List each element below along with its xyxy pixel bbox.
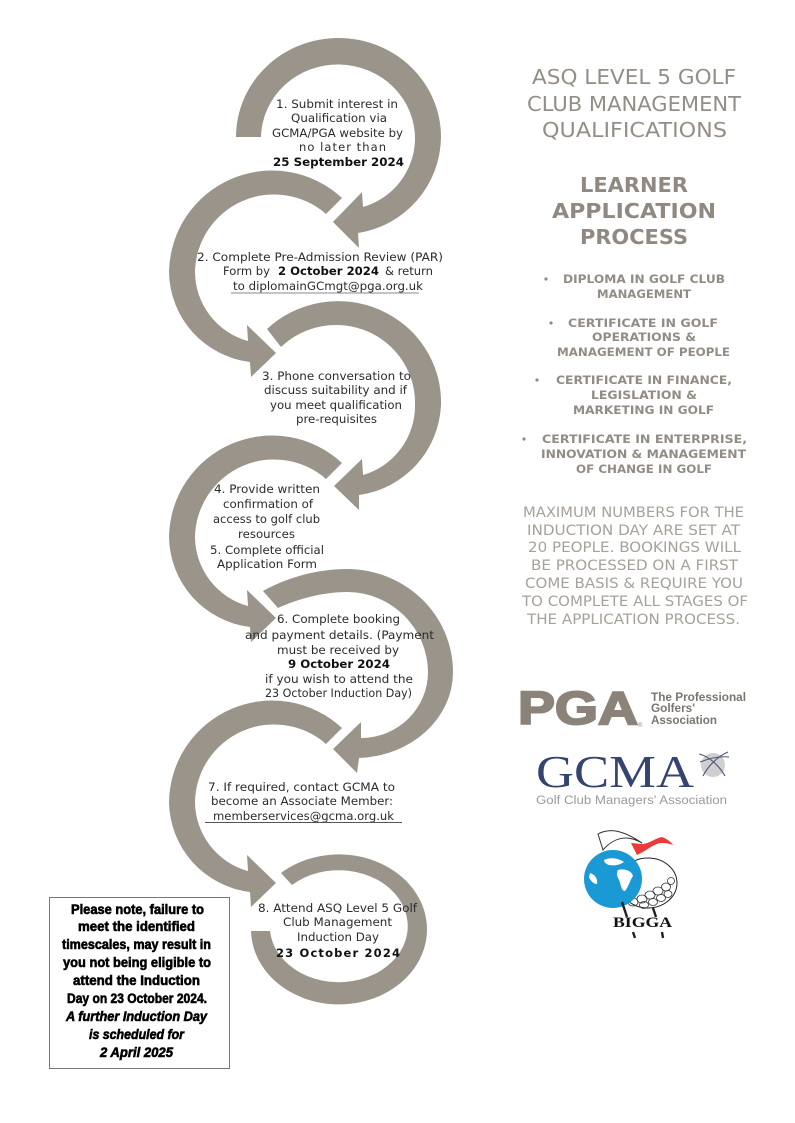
step 7 text: 7. If required, contact GCMA to (208, 780, 395, 794)
step 5 text (210, 543, 324, 571)
step 2 text: 2. Complete Pre-Admission Review (PAR) (197, 250, 443, 264)
step 1 text: GCMA/PGA website by (272, 126, 403, 140)
text block: induction day numbers: THE APPLICATION PROCESS. (526, 612, 740, 628)
title (527, 65, 741, 142)
step 4 text (213, 482, 320, 541)
step 6 text: if you wish to attend the (265, 672, 413, 686)
step 5 text: Application Form (217, 557, 317, 571)
callout: induction day note: 2 April 2025 (99, 1045, 173, 1060)
step 3 text: 3. Phone conversation to (262, 369, 411, 383)
callout: induction day note: A further Induction Day (65, 1009, 208, 1024)
step 8 text: Club Management (283, 915, 392, 929)
heading: learner application process: LEARNER (580, 173, 688, 197)
step 2 text: Form by (223, 264, 270, 278)
list: qualifications: MARKETING IN GOLF (573, 403, 714, 417)
step 8 text: 8. Attend ASQ Level 5 Golf (258, 901, 418, 915)
list: qualifications: INNOVATION & MANAGEMENT (541, 447, 746, 461)
step 7 text: memberservices@gcma.org.uk (213, 809, 394, 823)
logo: PGA: Association (651, 713, 717, 727)
step 2 text (197, 250, 443, 294)
logo: GCMA (536, 746, 729, 807)
text block: induction day numbers: MAXIMUM NUMBERS FOR THE (523, 505, 744, 521)
arrow: step 2 (169, 171, 342, 377)
step 3 text (262, 369, 411, 426)
step 1 text: no later than (299, 140, 386, 154)
step 5 text: 5. Complete official (210, 543, 324, 557)
step 4 text: confirmation of (223, 497, 314, 511)
heading: learner application process: APPLICATION (552, 199, 716, 223)
step 8 text: 23 October 2024 (276, 946, 400, 960)
arrow: step 6 (263, 569, 453, 773)
text block: induction day numbers: TO COMPLETE ALL STAGES OF (521, 594, 748, 610)
step 1 text: 25 September 2024 (273, 155, 404, 169)
logo: PGA: Golfers' (651, 701, 695, 715)
list: qualifications (522, 272, 747, 476)
step 2 text: & return (385, 264, 433, 278)
step 6 text: 23 October Induction Day) (265, 686, 412, 700)
callout: induction day note: timescales, may result in (62, 937, 211, 952)
callout: induction day note (50, 898, 230, 1068)
step 3 text: discuss suitability and if (264, 383, 408, 397)
logo: GCMA: Golf Club Managers' Association (536, 795, 727, 807)
arrow: steps 4 and 5 (169, 436, 342, 642)
logo: PGA (518, 682, 746, 734)
list: qualifications: MANAGEMENT OF PEOPLE (557, 345, 730, 359)
step 8 text (258, 901, 418, 960)
step 1 text: 1. Submit interest in (276, 97, 398, 111)
logo: PGA: ® (638, 722, 643, 729)
title: CLUB MANAGEMENT (527, 92, 741, 116)
callout: induction day note: Please note, failure to (71, 902, 204, 917)
step 2 text: 2 October 2024 (278, 264, 379, 278)
step 2 text: to diplomainGCmgt@pga.org.uk (233, 279, 423, 293)
step 6 text: 6. Complete booking (277, 612, 400, 626)
step 7 text (205, 780, 402, 823)
list: qualifications: CERTIFICATE IN GOLF (568, 316, 718, 330)
step 4 text: 4. Provide written (214, 482, 320, 496)
arrow: step 7 (169, 701, 342, 907)
list: qualifications: CERTIFICATE IN FINANCE, (556, 373, 732, 387)
arrow: step 3 (267, 301, 441, 510)
callout: induction day note: you not being eligible to (63, 955, 211, 970)
list: qualifications: LEGISLATION & (591, 388, 697, 402)
step 3 text: pre-requisites (296, 412, 377, 426)
step 3 text: you meet qualification (270, 398, 402, 412)
step 8 text: Induction Day (297, 930, 379, 944)
step 1 text (272, 97, 404, 169)
step 4 text: resources (238, 527, 295, 541)
text block: induction day numbers: COME BASIS & REQUIRE YOU (525, 576, 743, 592)
logo: GCMA: GCMA (536, 746, 694, 797)
logo: PGA: The Professional (651, 690, 746, 704)
step 4 text: access to golf club (213, 512, 320, 526)
text block: induction day numbers: BE PROCESSED ON A FIRST (531, 558, 738, 574)
logo: BIGGA: BIGGA (613, 915, 672, 931)
list: qualifications: MANAGEMENT (597, 287, 691, 301)
list: qualifications: DIPLOMA IN GOLF CLUB (563, 272, 725, 286)
heading: learner application process: PROCESS (580, 225, 688, 249)
heading: learner application process (552, 173, 716, 249)
arrow: step 8 ring (251, 854, 427, 1004)
text block: induction day numbers (521, 505, 748, 628)
step 6 text (245, 612, 435, 700)
arrow: step 1 (236, 38, 441, 248)
step 6 text: 9 October 2024 (288, 657, 390, 671)
step 6 text: and payment details. (Payment (245, 628, 435, 642)
logo: PGA: PGA (518, 682, 638, 734)
logo: BIGGA (584, 831, 677, 938)
step 1 text: Qualification via (291, 111, 387, 125)
callout: induction day note: meet the identified (78, 919, 195, 934)
title: ASQ LEVEL 5 GOLF (532, 65, 736, 89)
list: qualifications: CERTIFICATE IN ENTERPRISE, (542, 432, 747, 446)
step 7 text: become an Associate Member: (211, 794, 393, 808)
text block: induction day numbers: 20 PEOPLE. BOOKINGS WILL (528, 540, 741, 556)
list: qualifications: OF CHANGE IN GOLF (576, 462, 712, 476)
callout: induction day note: attend the Induction (73, 973, 200, 988)
text block: induction day numbers: INDUCTION DAY ARE SET AT (527, 523, 740, 539)
callout: induction day note: is scheduled for (89, 1027, 185, 1042)
step 6 text: must be received by (277, 643, 399, 657)
callout: induction day note: Day on 23 October 2024. (67, 991, 207, 1006)
list: qualifications: OPERATIONS & (592, 330, 696, 344)
title: QUALIFICATIONS (542, 118, 727, 142)
